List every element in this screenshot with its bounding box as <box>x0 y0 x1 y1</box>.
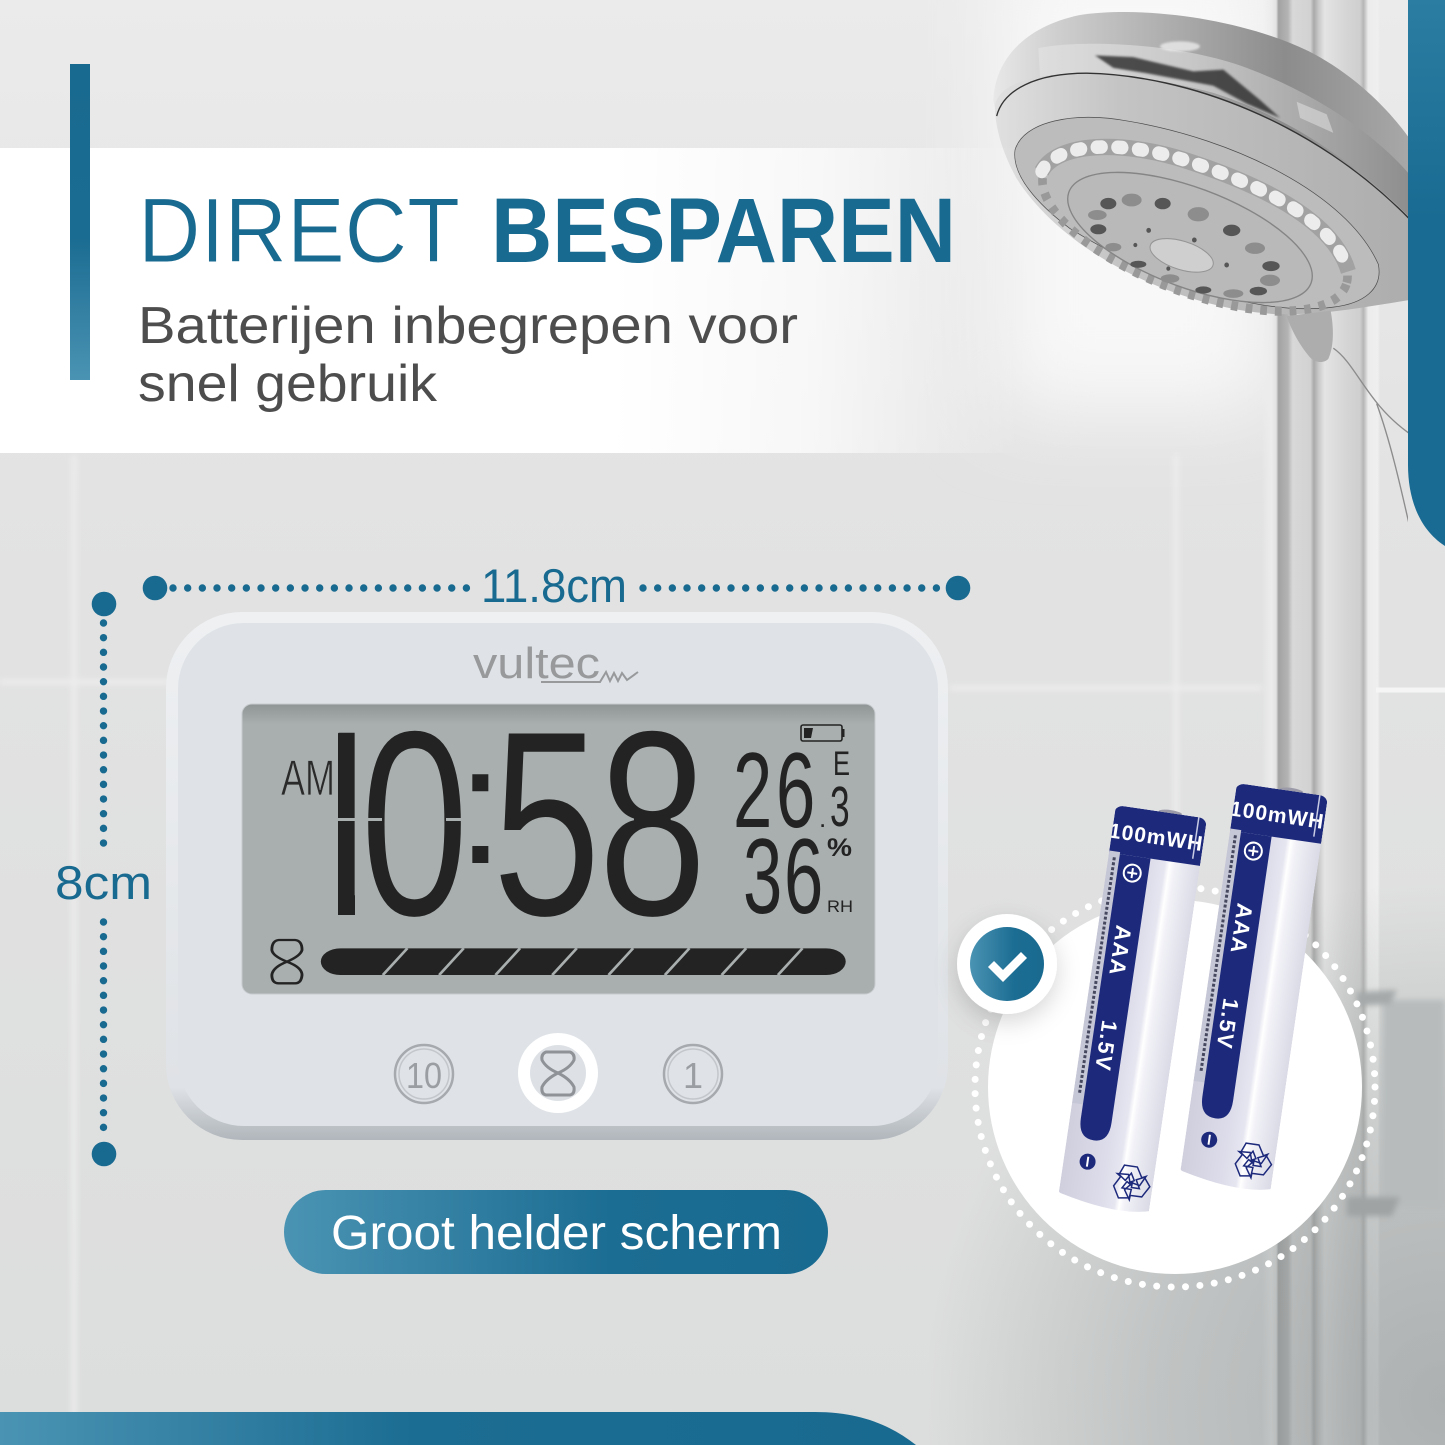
button: 1 minute <box>664 1045 722 1103</box>
AAA battery left <box>1054 802 1207 1220</box>
temperature reading: 2 <box>733 731 772 851</box>
shower disc <box>995 73 1410 314</box>
clock reading: 0 <box>360 676 469 972</box>
caption pill: Groot helder scherm <box>331 1207 782 1260</box>
button: 10 minutes: 10 <box>406 1055 442 1096</box>
clock reading: 5 <box>492 676 601 972</box>
AM label: AM <box>281 750 335 806</box>
chrome inner rim <box>1038 44 1410 218</box>
temperature reading: E <box>833 745 850 783</box>
nozzle ring <box>1035 138 1356 316</box>
device case <box>166 612 948 1140</box>
LCD screen <box>242 704 875 994</box>
AAA battery right: 100mWH <box>1229 797 1325 834</box>
humidity reading <box>743 817 853 937</box>
AAA battery left: 100mWH <box>1107 819 1204 856</box>
width dimension: 11.8cm <box>481 559 627 612</box>
humidity reading: RH <box>827 897 853 916</box>
AAA battery left: 1.5V <box>1090 1019 1122 1072</box>
shower inner face <box>1015 117 1379 309</box>
clock reading: 8 <box>598 676 707 972</box>
temperature reading: 3 <box>830 776 850 839</box>
button: 1 minute: 1 <box>683 1055 703 1096</box>
AAA battery right: 1.5V <box>1212 997 1244 1050</box>
AAA battery right: AAA <box>1226 902 1258 955</box>
side accent: blue top-right bar <box>1408 0 1445 546</box>
spray plate centre <box>1150 238 1214 273</box>
spray holes <box>1088 194 1280 298</box>
temperature reading: . <box>819 803 826 833</box>
title: DIRECT <box>138 180 460 282</box>
icon: check badge <box>957 914 1057 1014</box>
hourglass symbol <box>272 940 302 983</box>
clock reading <box>338 730 698 917</box>
chrome housing <box>994 12 1408 216</box>
AAA battery right <box>1175 780 1328 1198</box>
battery level icon <box>801 725 844 741</box>
icon: recycling <box>1112 1164 1151 1202</box>
button: 10 minutes <box>395 1045 453 1103</box>
brand logo <box>473 639 638 688</box>
accent bar <box>70 64 90 380</box>
width dimension <box>143 559 970 612</box>
height dimension <box>55 592 152 1166</box>
humidity reading: 3 <box>743 817 782 937</box>
subtitle <box>138 297 798 413</box>
caption pill <box>284 1190 828 1274</box>
temperature reading <box>733 731 850 851</box>
brand logo: vultec <box>473 639 600 688</box>
chrome reflection <box>1095 55 1280 118</box>
footer bar <box>0 1412 916 1445</box>
shower lever <box>1287 311 1333 362</box>
humidity reading: % <box>827 834 852 862</box>
shower hose <box>1333 348 1408 522</box>
title bold: BESPAREN <box>491 180 956 282</box>
AAA battery left: AAA <box>1104 924 1136 977</box>
countdown bar <box>272 940 846 983</box>
battery spotlight circle <box>975 887 1375 1287</box>
timer device <box>166 612 948 1140</box>
header band <box>0 148 1020 453</box>
temperature reading: 6 <box>776 731 815 851</box>
button: timer <box>518 1033 598 1113</box>
icon: recycling <box>1234 1142 1272 1180</box>
clock reading: : <box>457 711 504 899</box>
spray plate <box>1067 172 1313 304</box>
subtitle: snel gebruik <box>138 355 438 413</box>
subtitle: Batterijen inbegrepen voor <box>138 297 798 355</box>
shower head photo illustration <box>993 12 1417 557</box>
humidity reading: 6 <box>784 817 823 937</box>
height dimension: 8cm <box>55 856 152 909</box>
clock reading: 1 <box>288 676 397 972</box>
